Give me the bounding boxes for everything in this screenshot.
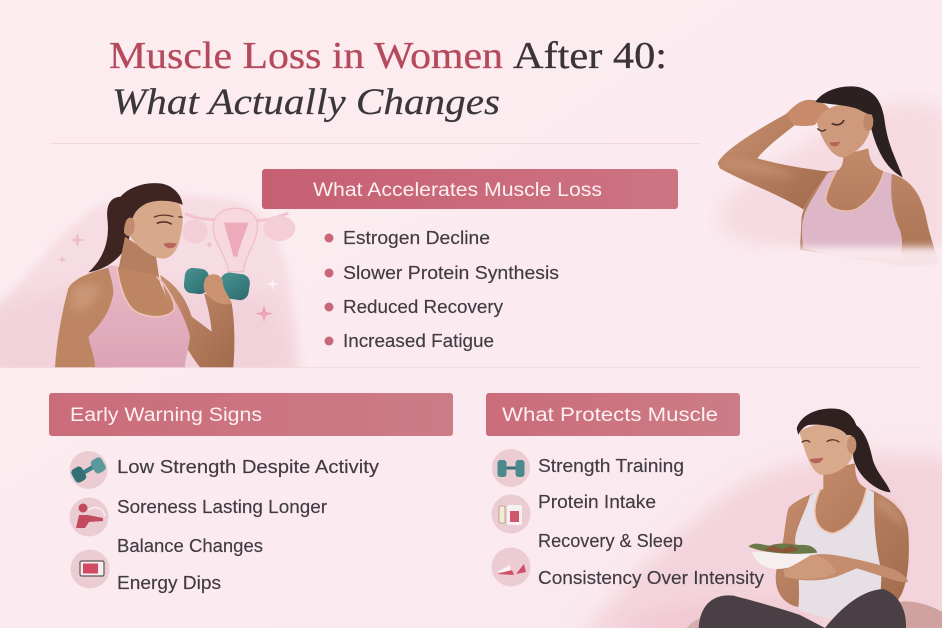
list: what protects muscle: Recovery & Sleep <box>538 531 683 551</box>
title: After 40: <box>513 35 667 77</box>
tank top <box>795 488 882 618</box>
list: early warning signs: Low Strength Despite Activity <box>117 457 379 477</box>
title <box>109 35 667 123</box>
body and arms <box>776 463 909 615</box>
list: early warning signs: Balance Changes <box>117 536 263 556</box>
hand <box>787 100 831 126</box>
list: what protects muscle <box>492 449 764 588</box>
hand under bowl <box>783 555 837 579</box>
salad bowl <box>748 544 817 569</box>
crossed legs <box>699 589 906 628</box>
pink wash behind figure <box>2 196 294 354</box>
list: early warning signs <box>70 451 379 593</box>
fade at base <box>760 247 942 277</box>
head <box>799 425 854 475</box>
icon: sore arm figure <box>70 498 108 536</box>
list: early warning signs: Soreness Lasting Longer <box>117 497 327 517</box>
icon: low battery <box>70 550 110 588</box>
list: what protects muscle: Strength Training <box>538 456 684 476</box>
head <box>128 199 183 259</box>
icon: uterus <box>182 208 295 272</box>
icon: protein shake and bottle <box>492 494 530 534</box>
illustration: seated woman with salad bowl <box>580 409 942 628</box>
title: What Actually Changes <box>112 82 500 123</box>
list: what accelerates muscle loss: Reduced Recovery <box>343 297 503 317</box>
hair <box>796 408 856 436</box>
left arm and chest <box>55 267 173 367</box>
illustration: tired woman with hand on forehead <box>718 86 942 277</box>
ponytail <box>860 88 903 177</box>
icon: dumbbell <box>70 451 108 489</box>
head <box>817 104 871 157</box>
pink wash behind figure <box>580 454 942 628</box>
header: Early Warning Signs <box>49 393 453 436</box>
list: what protects muscle: Protein Intake <box>538 492 656 512</box>
list: what accelerates muscle loss: Slower Protein Synthesis <box>343 263 559 283</box>
icon: dumbbell <box>183 267 251 304</box>
list: what accelerates muscle loss: Increased Fatigue <box>343 331 494 351</box>
icon: dumbbell <box>492 449 530 487</box>
illustration: woman with dumbbell and uterus graphic <box>0 183 297 380</box>
list: what accelerates muscle loss: Estrogen Decline <box>343 228 490 248</box>
title: Muscle Loss in Women <box>109 35 503 77</box>
list: what accelerates muscle loss <box>324 228 559 351</box>
pink wash behind figure <box>720 102 942 259</box>
ponytail <box>850 422 891 492</box>
header: What Protects Muscle: What Protects Muscle <box>502 405 718 426</box>
torso and right arm <box>800 148 939 267</box>
hair <box>815 86 875 114</box>
speckled ground <box>900 601 942 628</box>
right arm and forearm <box>160 275 234 367</box>
face details <box>154 215 183 224</box>
header: What Accelerates Muscle Loss: What Accelerates Muscle Loss <box>313 180 602 201</box>
tank top <box>88 265 190 367</box>
header: What Protects Muscle <box>486 393 740 436</box>
ponytail <box>88 197 130 272</box>
tank top <box>802 170 902 258</box>
header: Early Warning Signs: Early Warning Signs <box>70 405 262 426</box>
face details <box>817 120 844 131</box>
list: early warning signs: Energy Dips <box>117 573 221 593</box>
sparkles <box>70 233 84 247</box>
face details <box>802 440 839 442</box>
forearm and hand <box>783 554 908 582</box>
icon: recovery and consistency <box>492 548 530 586</box>
header: What Accelerates Muscle Loss <box>262 169 678 209</box>
raised arm <box>718 113 828 209</box>
hair <box>120 183 183 232</box>
neck <box>118 237 160 283</box>
list: what protects muscle: Consistency Over Intensity <box>538 568 764 588</box>
